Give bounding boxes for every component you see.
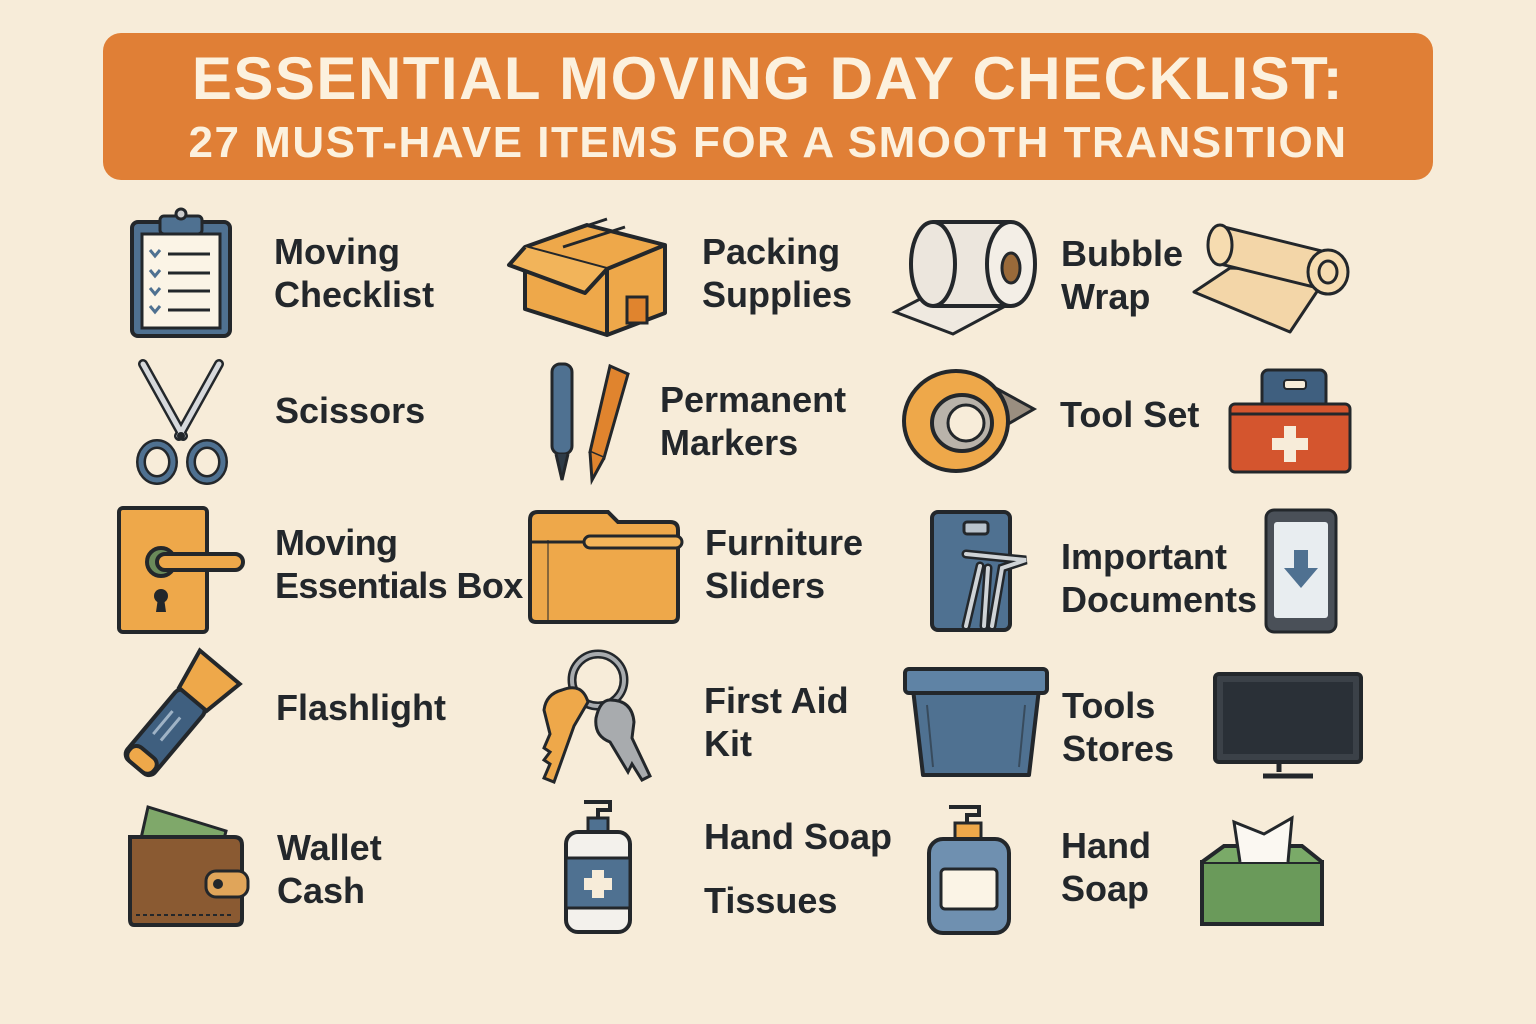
icon: toolbox bbox=[1228, 368, 1352, 474]
icon: phone bbox=[1264, 508, 1338, 634]
label: Moving Essentials Box: Essentials Box bbox=[275, 565, 523, 606]
icon: door lock bbox=[117, 506, 245, 634]
label: Wallet Cash: Cash bbox=[277, 870, 365, 911]
icon: tissue box bbox=[1200, 815, 1324, 926]
label: Wallet Cash bbox=[277, 827, 382, 911]
icon: clipboard bbox=[130, 208, 232, 338]
label: Important Documents bbox=[1061, 536, 1257, 620]
label: Bubble Wrap: Wrap bbox=[1061, 276, 1150, 317]
label: Important Documents: Important bbox=[1061, 536, 1227, 577]
label: Tools Stores: Tools bbox=[1062, 685, 1155, 726]
label: Hand Soap (second): Hand bbox=[1061, 825, 1151, 866]
label: Furniture Sliders: Furniture bbox=[705, 522, 863, 563]
header banner bbox=[103, 33, 1433, 180]
label: Packing Supplies bbox=[702, 231, 852, 315]
icon: folder bbox=[528, 510, 684, 624]
icon: storage bin bbox=[903, 667, 1049, 777]
label: Tool Set: Tool Set bbox=[1060, 394, 1199, 435]
icon: soap dispenser bbox=[927, 805, 1011, 935]
label: Permanent Markers bbox=[660, 379, 846, 463]
icon: cardboard box bbox=[506, 218, 667, 337]
label: First Aid Kit bbox=[704, 680, 849, 764]
label: Tools Stores: Stores bbox=[1062, 728, 1174, 769]
label: Tissues: Tissues bbox=[704, 880, 837, 921]
label: Packing Supplies: Supplies bbox=[702, 274, 852, 315]
icon: door with dolly bbox=[930, 510, 1028, 632]
icon: bubble wrap roll bbox=[891, 220, 1037, 336]
icon: paper roll bbox=[1192, 224, 1350, 334]
label: Moving Essentials Box bbox=[275, 522, 523, 606]
label: Hand Soap: Hand Soap bbox=[704, 816, 892, 857]
label: Wallet Cash: Wallet bbox=[277, 827, 382, 868]
label: Important Documents: Documents bbox=[1061, 579, 1257, 620]
label: First Aid Kit: First Aid bbox=[704, 680, 849, 721]
label: Scissors: Scissors bbox=[275, 390, 425, 431]
label: Bubble Wrap: Bubble bbox=[1061, 233, 1183, 274]
label: Packing Supplies: Packing bbox=[702, 231, 840, 272]
label: Furniture Sliders bbox=[705, 522, 863, 606]
label: Furniture Sliders: Sliders bbox=[705, 565, 825, 606]
icon: scissors bbox=[136, 359, 228, 485]
label: Permanent Markers: Markers bbox=[660, 422, 798, 463]
label: Moving Essentials Box: Moving bbox=[275, 522, 397, 563]
label: Tools Stores bbox=[1062, 685, 1174, 769]
title: ESSENTIAL MOVING DAY CHECKLIST: bbox=[192, 45, 1344, 112]
icon: tape bbox=[902, 369, 1037, 473]
label: Moving Checklist: Checklist bbox=[274, 274, 434, 315]
label: Bubble Wrap bbox=[1061, 233, 1183, 317]
icon: wallet bbox=[128, 805, 250, 927]
label: Hand Soap (second) bbox=[1061, 825, 1151, 909]
label: Permanent Markers: Permanent bbox=[660, 379, 846, 420]
icon: markers bbox=[550, 362, 630, 486]
icon: sanitizer bottle bbox=[564, 800, 632, 934]
label: Hand Soap (second): Soap bbox=[1061, 868, 1149, 909]
icon: TV bbox=[1213, 672, 1363, 778]
label: Flashlight: Flashlight bbox=[276, 687, 446, 728]
label: First Aid Kit: Kit bbox=[704, 723, 752, 764]
icon: flashlight bbox=[124, 647, 243, 778]
label: Moving Checklist bbox=[274, 231, 434, 315]
subtitle: 27 MUST-HAVE ITEMS FOR A SMOOTH TRANSITION bbox=[189, 118, 1347, 167]
label: Moving Checklist: Moving bbox=[274, 231, 400, 272]
icon: keys bbox=[542, 650, 652, 784]
